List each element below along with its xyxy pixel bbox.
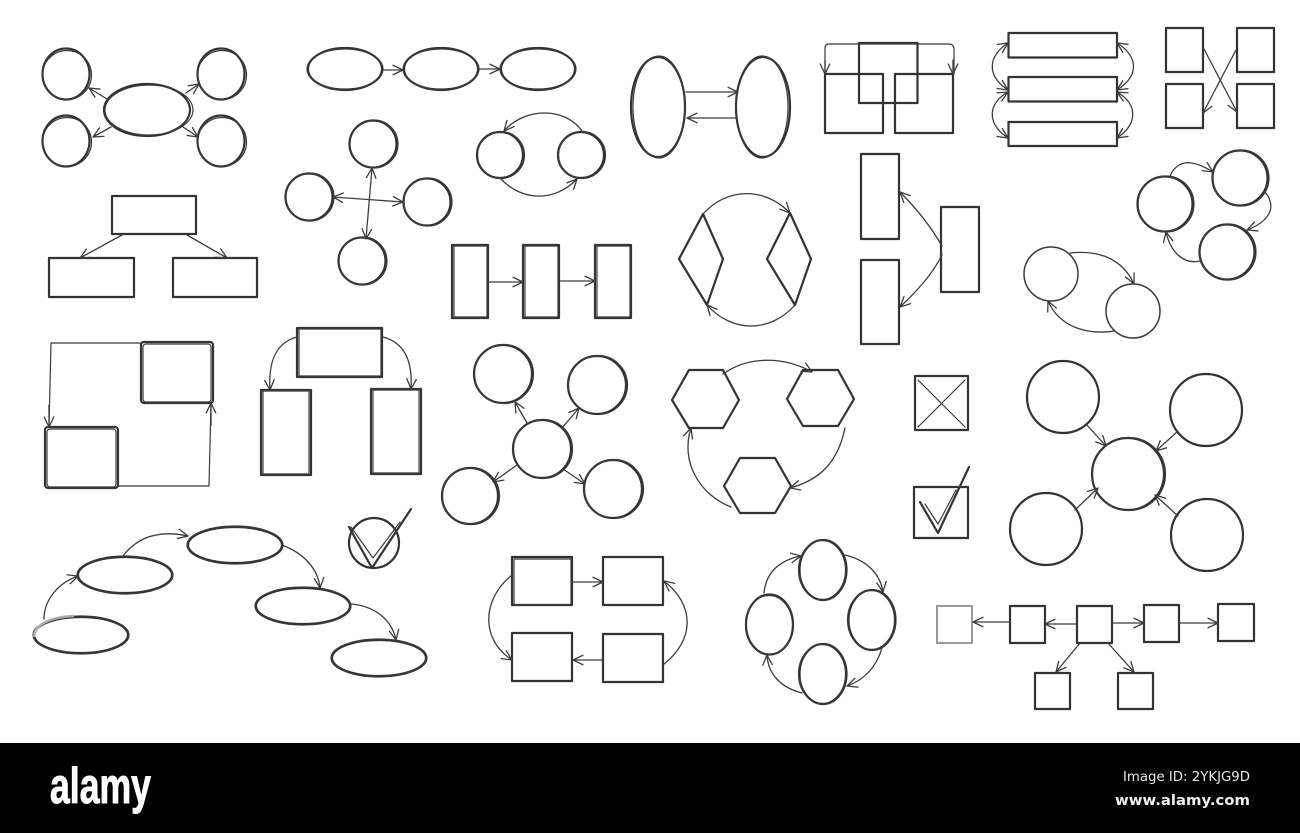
diagram: branching bars	[861, 154, 979, 344]
diagram: four boxes in a cycle	[489, 557, 687, 682]
diagram: two circles with curved arrows	[1024, 247, 1160, 338]
image id: Image ID: 2YKJG9D	[1123, 769, 1250, 785]
logo: alamy: alamy	[50, 758, 151, 814]
icon: crossed checkbox	[915, 376, 968, 430]
diagram: rectangle tree with two children	[49, 196, 257, 297]
diagram: three circles cycle	[1138, 150, 1271, 280]
diagram: large hub with four big circles	[1010, 361, 1243, 571]
diagram: oval hub with four circles	[42, 48, 246, 166]
diagram: large square with two corner squares	[45, 342, 213, 488]
diagram: interlocking rectangles	[825, 43, 954, 133]
diagram: four squares with crossing arrows	[1166, 28, 1274, 128]
diagram: two tall ovals with arrows	[631, 56, 790, 158]
diagram: three hexagons in a loop	[672, 360, 854, 513]
diagram: row of small squares with branches	[937, 604, 1254, 709]
diagram: three stacked bars with side arrows	[992, 33, 1134, 146]
icon: ticked circle	[349, 509, 411, 568]
footer bar	[0, 743, 1300, 833]
diagram: four ovals in a ring	[746, 540, 896, 704]
diagram: two circles with looping arrows	[477, 113, 606, 196]
diagram: three vertical bars in a row	[452, 245, 631, 318]
website: www.alamy.com	[1115, 793, 1250, 809]
diagram: central arrows between four circles	[286, 120, 452, 285]
icon: ticked checkbox	[914, 467, 969, 538]
diagram: hub circle with four outer circles	[442, 344, 644, 524]
diagram: box over two bars with curved arrows	[261, 328, 421, 475]
diagram: winding chain of ovals	[33, 526, 427, 677]
diagram: two half hexagons in a circular loop	[679, 194, 811, 326]
diagram: three linked ovals	[307, 48, 576, 90]
